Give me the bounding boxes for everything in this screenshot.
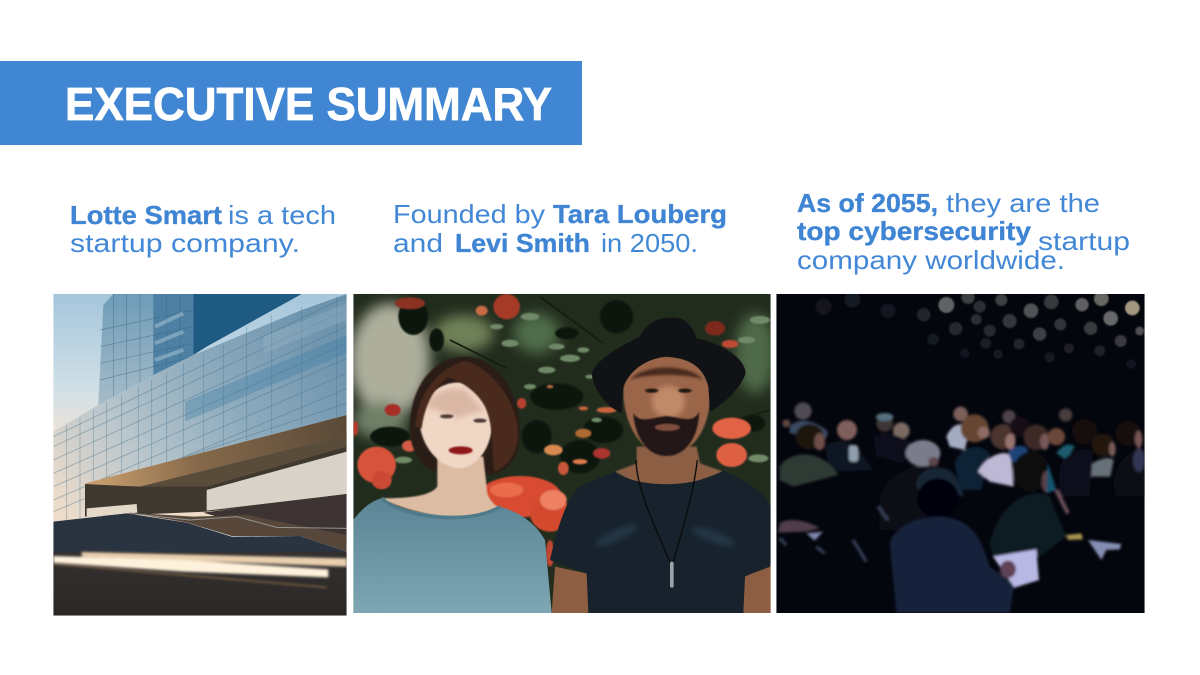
man in green shirt [780, 424, 838, 487]
foliage background [350, 294, 775, 613]
back row left [782, 402, 913, 472]
beard [633, 412, 699, 456]
dark background [776, 294, 1145, 613]
face highlight [652, 386, 685, 418]
black hat [592, 317, 746, 413]
stair ramp [128, 513, 347, 552]
photo: conference audience [776, 291, 1145, 613]
face shadow [425, 389, 483, 418]
foreground person with cap [890, 467, 1015, 613]
right side papers [1088, 540, 1121, 560]
text block: founders: and [393, 228, 443, 258]
left arm [778, 520, 820, 533]
chairs [780, 507, 888, 562]
text block: company description: startup company. [70, 228, 300, 258]
lips [449, 446, 473, 454]
text block: market position: As of 2055, [797, 188, 938, 218]
neck [380, 457, 501, 518]
heading: EXECUTIVE SUMMARY [65, 78, 552, 130]
hair back [410, 357, 520, 475]
mouth area [655, 424, 680, 431]
text block: company description: Lotte Smart [70, 200, 222, 230]
road [53, 552, 347, 616]
text block: market position: top cybersecurity [797, 216, 1032, 246]
audience [778, 402, 1145, 613]
neck [615, 447, 723, 487]
grey-haired man [880, 440, 946, 530]
text block: market position [797, 188, 1130, 275]
lower glazing [85, 435, 347, 517]
text block: founders [393, 199, 727, 258]
necklace [636, 460, 697, 567]
photo: glass office building [53, 294, 347, 616]
text block: founders: Tara Louberg [553, 199, 727, 229]
t-shirt [550, 471, 771, 613]
text block: founders: Levi Smith [455, 228, 590, 258]
arms [552, 567, 771, 613]
canopy soffit [85, 415, 347, 487]
woman [353, 357, 552, 613]
executive summary slide [0, 61, 1145, 616]
glazing reflection [207, 452, 347, 511]
hand [1000, 561, 1016, 578]
text block: company description [70, 200, 336, 258]
photo: two founders [350, 294, 775, 613]
plinth [53, 513, 347, 557]
notebook [993, 549, 1039, 588]
face [421, 383, 492, 468]
sweater [353, 498, 552, 613]
text block: market position: startup [1038, 226, 1130, 256]
head [623, 357, 710, 456]
dark wall [203, 494, 347, 543]
man with teal shirt [990, 452, 1068, 557]
eyes [645, 389, 658, 393]
bokeh lights [816, 291, 1144, 369]
centre back row [946, 407, 1145, 497]
main glass facade [53, 294, 347, 522]
text block: company description: is a tech [228, 200, 336, 230]
upper tower [98, 294, 302, 405]
pendant [670, 562, 674, 588]
banner background [0, 61, 582, 145]
hat shadow on forehead [630, 367, 703, 380]
text block: founders: Founded by [393, 199, 545, 229]
man [550, 317, 771, 613]
eyes [440, 414, 453, 418]
text block: founders: in 2050. [601, 228, 698, 258]
hair fringe [415, 361, 518, 472]
text block: market position: company worldwide. [797, 245, 1065, 275]
sky [53, 294, 347, 527]
light trail [53, 552, 347, 587]
title banner [0, 61, 582, 145]
text block: market position: they are the [946, 188, 1100, 218]
red flowers [353, 294, 751, 567]
